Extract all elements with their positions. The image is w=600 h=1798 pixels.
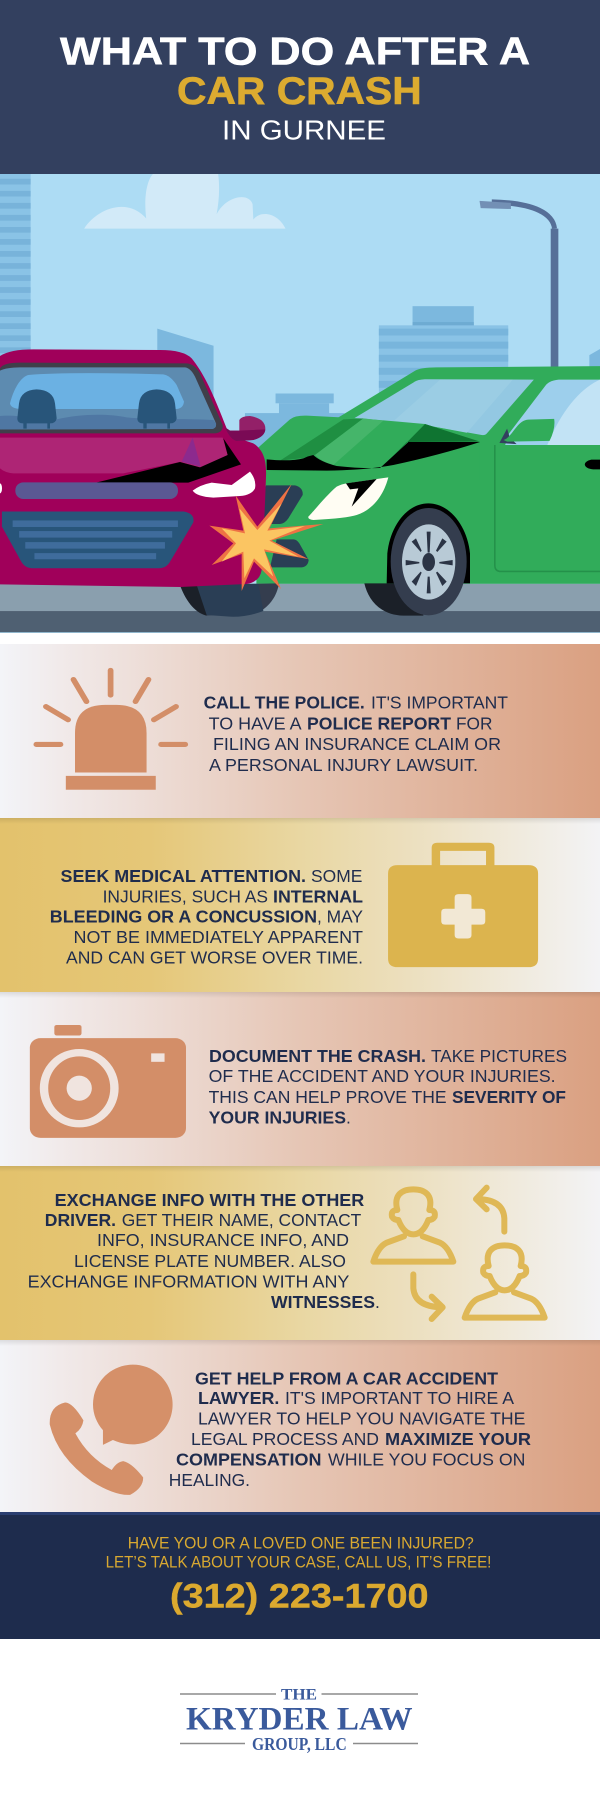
background buildings [157,306,600,450]
text: exchange info: GET THEIR NAME, CONTACT [122,1210,362,1230]
text: seek medical attention: AND CAN GET WORSE OVER TIME. [66,948,363,968]
text: get help from a lawyer: WHILE YOU FOCUS ON [328,1450,525,1470]
icon: siren [36,670,185,790]
text: call the police: TO HAVE A [209,714,302,734]
logo: the kryder law group: THE [281,1686,317,1704]
green car body [256,366,600,584]
logo: the kryder law group: KRYDER LAW [186,1702,412,1738]
icon: camera [30,1025,186,1138]
panel: exchange info [0,1166,600,1340]
icon: phone and speech bubble [50,1365,173,1495]
icon: first aid kit [388,843,538,967]
panel: document the crash [0,992,600,1166]
text: seek medical attention: , MAY [317,906,363,926]
text: call the police: FOR [456,714,492,734]
text: seek medical attention: SEEK MEDICAL ATTENTION. [60,866,306,886]
text: seek medical attention: INJURIES, SUCH AS [103,886,268,906]
title line: what to do after a: WHAT TO DO AFTER A [60,30,530,74]
panel: get help from a lawyer [0,1340,600,1513]
text: call the police: IT'S IMPORTANT [371,693,508,713]
text: seek medical attention [50,866,363,968]
text: exchange info: LICENSE PLATE NUMBER. ALSO [74,1251,346,1271]
text: exchange info: EXCHANGE INFORMATION WITH ANY [28,1271,350,1291]
text: exchange info [28,1190,380,1312]
text: call the police: POLICE REPORT [307,714,451,734]
red car grille [2,511,194,568]
text: document the crash: OF THE ACCIDENT AND YOUR INJURIES. [209,1066,556,1086]
headrests [17,389,177,429]
text: get help from a lawyer: COMPENSATION [176,1450,322,1470]
panel: call the police [0,644,600,818]
text: exchange info: WITNESSES [271,1292,375,1312]
text: exchange info: INFO, INSURANCE INFO, AND [97,1230,349,1250]
text: seek medical attention: SOME [311,866,362,886]
call to action text: HAVE YOU OR A LOVED ONE BEEN INJURED? [128,1535,474,1553]
text: get help from a lawyer: MAXIMIZE YOUR [385,1429,531,1449]
text: get help from a lawyer: GET HELP FROM A CAR ACCIDENT [195,1369,498,1389]
green car front and wheel [253,416,480,616]
phone number: (312) 223-1700 [170,1578,429,1616]
impact star [209,484,323,591]
text: get help from a lawyer: HEALING. [169,1470,250,1490]
text: seek medical attention: INTERNAL [273,886,363,906]
street lamp [480,201,555,367]
call to action text [106,1535,491,1572]
icon: two people exchanging info [373,1188,545,1319]
text: call the police: CALL THE POLICE. [204,693,365,713]
cloud [84,174,285,229]
text: exchange info: . [375,1292,380,1312]
text: call the police [204,693,508,775]
text: exchange info: DRIVER. [45,1210,116,1230]
text: call the police: A PERSONAL INJURY LAWSUIT. [209,755,478,775]
text: call the police: FILING AN INSURANCE CLAIM OR [213,734,501,754]
text: document the crash: YOUR INJURIES [209,1108,346,1128]
text: document the crash: THIS CAN HELP PROVE THE [209,1087,447,1107]
panel: seek medical attention [0,818,600,992]
text: seek medical attention: BLEEDING OR A CONCUSSION [50,906,317,926]
text: document the crash: DOCUMENT THE CRASH. [209,1046,426,1066]
red car front wheel [180,583,279,617]
logo: the kryder law group [180,1686,418,1754]
left tower [0,174,31,370]
text: get help from a lawyer: LEGAL PROCESS AND [191,1429,379,1449]
text: get help from a lawyer: LAWYER TO HELP YOU NAVIGATE THE [198,1408,525,1428]
text: get help from a lawyer [169,1369,531,1490]
text: exchange info: EXCHANGE INFO WITH THE OTHER [55,1190,365,1210]
title line: in gurnee: IN GURNEE [222,115,386,146]
text: document the crash [209,1046,567,1128]
text: document the crash: SEVERITY OF [452,1087,566,1107]
text: seek medical attention: NOT BE IMMEDIATELY APPARENT [74,927,363,947]
red car [0,349,266,587]
crash scene illustration [0,174,600,633]
logo: the kryder law group: GROUP, LLC [252,1734,347,1754]
text: get help from a lawyer: IT'S IMPORTANT TO HIRE A [285,1388,514,1408]
header banner [0,0,600,174]
call to action text: LET’S TALK ABOUT YOUR CASE, CALL US, IT’S FREE! [106,1554,491,1572]
text: document the crash: . [346,1108,351,1128]
text: document the crash: TAKE PICTURES [431,1046,567,1066]
road [0,584,600,632]
call to action banner [0,1512,600,1639]
text: get help from a lawyer: LAWYER. [198,1388,279,1408]
title line: car crash: CAR CRASH [177,70,422,113]
